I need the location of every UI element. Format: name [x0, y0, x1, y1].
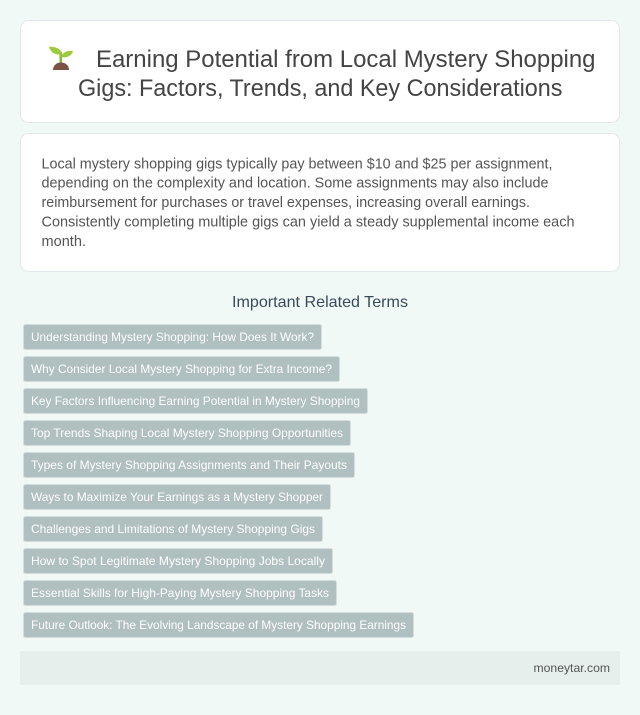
tag 10: Future Outlook: The Evolving Landscape of Mystery Shopping Earnings	[31, 618, 406, 632]
description text: month.	[42, 234, 86, 250]
tag 7	[24, 516, 322, 542]
panel: description card	[20, 134, 620, 272]
title: Gigs: Factors, Trends, and Key Considerations	[78, 75, 562, 102]
panel: title card	[20, 20, 620, 122]
tag 6: Ways to Maximize Your Earnings as a Mystery Shopper	[31, 490, 323, 504]
footer bar	[20, 651, 620, 685]
description text: reimbursement for purchases or travel expenses, increasing overall earnings.	[42, 195, 530, 211]
tag 5: Types of Mystery Shopping Assignments and Their Payouts	[31, 458, 347, 472]
description text: Local mystery shopping gigs typically pay between $10 and $25 per assignment,	[42, 156, 552, 172]
tag 8	[24, 548, 332, 574]
footer source text: moneytar.com	[534, 661, 610, 675]
tag 1: Understanding Mystery Shopping: How Does It Work?	[31, 330, 314, 344]
tag 7: Challenges and Limitations of Mystery Shopping Gigs	[31, 522, 315, 536]
list of related term tags	[24, 324, 414, 638]
tag 3: Key Factors Influencing Earning Potential in Mystery Shopping	[31, 394, 360, 408]
tag 2: Why Consider Local Mystery Shopping for Extra Income?	[31, 362, 332, 376]
icon: sprout	[49, 47, 73, 70]
tag 5	[24, 452, 354, 478]
tag 4: Top Trends Shaping Local Mystery Shopping Opportunities	[31, 426, 343, 440]
tag 1	[24, 324, 322, 350]
title: Earning Potential from Local Mystery Shopping	[96, 46, 596, 73]
tag 3	[24, 388, 368, 414]
tag 4	[24, 420, 350, 446]
tag 6	[24, 484, 330, 510]
tag 10	[24, 612, 414, 638]
description text: depending on the complexity and location. Some assignments may also include	[42, 176, 548, 192]
tag 9: Essential Skills for High-Paying Mystery Shopping Tasks	[31, 586, 329, 600]
tag 9	[24, 580, 336, 606]
description text	[42, 156, 574, 250]
tag 2	[24, 356, 340, 382]
title	[78, 46, 596, 102]
description text: Consistently completing multiple gigs can yield a steady supplemental income each	[42, 214, 574, 230]
heading: important related terms: Important Related Terms	[232, 294, 408, 311]
tag 8: How to Spot Legitimate Mystery Shopping Jobs Locally	[31, 554, 325, 568]
